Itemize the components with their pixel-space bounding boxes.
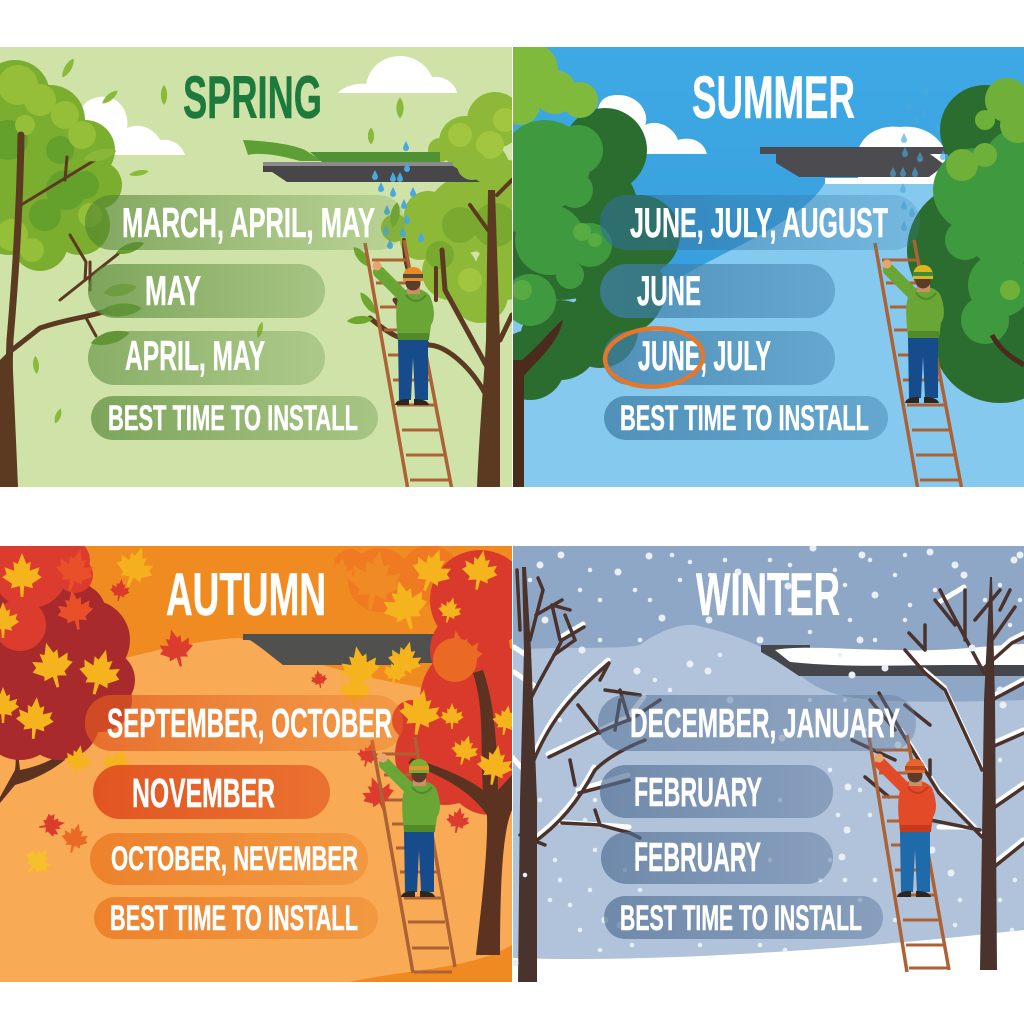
autumn ladder	[372, 737, 455, 973]
panel: spring	[0, 47, 555, 490]
winter gutter	[761, 644, 1024, 676]
winter worker	[874, 754, 936, 897]
summer pill: peak	[600, 264, 835, 318]
winter pill: february	[601, 832, 833, 884]
winter title: WINTER	[696, 561, 840, 628]
winter pill: best time: BEST TIME TO INSTALL	[620, 899, 862, 938]
summer highlight ring	[604, 326, 704, 389]
summer sky	[513, 47, 1024, 286]
spring pill: peak	[88, 264, 325, 318]
autumn pill: peak: NOVEMBER	[132, 770, 275, 816]
summer light hill	[513, 183, 1024, 487]
spring worker	[372, 262, 434, 405]
winter sky	[513, 546, 1024, 982]
panel: winter	[512, 546, 1024, 982]
winter pill: february: FEBRUARY	[634, 834, 761, 880]
winter ladder	[869, 735, 949, 972]
panel: summer	[480, 42, 1024, 490]
spring pill: months: MARCH, APRIL, MAY	[122, 199, 375, 246]
summer pill: best time: BEST TIME TO INSTALL	[620, 399, 869, 438]
spring pill: april may	[88, 331, 325, 385]
autumn falling leaves	[18, 625, 329, 881]
winter snowflakes	[515, 548, 1020, 963]
autumn pill: october november	[90, 833, 368, 885]
autumn left tree	[0, 532, 160, 803]
summer clouds	[590, 95, 945, 184]
autumn pill: best time: BEST TIME TO INSTALL	[110, 899, 358, 938]
autumn background	[0, 546, 512, 688]
spring clouds	[72, 56, 457, 155]
winter pill: best time	[604, 896, 883, 939]
summer water drops	[890, 104, 946, 231]
autumn gutter	[243, 634, 450, 665]
summer left tree	[513, 47, 680, 487]
winter snow ground	[513, 930, 1024, 982]
spring water drops	[372, 141, 424, 249]
summer pill: best time	[604, 396, 888, 440]
summer pill: peak: JUNE	[637, 267, 701, 314]
spring pill: peak: MAY	[145, 267, 201, 314]
winter pill: months	[598, 695, 916, 751]
autumn hill	[0, 638, 512, 982]
autumn pill: months: SEPTEMBER, OCTOBER	[107, 700, 392, 746]
winter pill: peak	[600, 765, 833, 818]
autumn worker	[378, 754, 440, 897]
summer pill: months	[600, 195, 920, 250]
autumn pill: october november: OCTOBER, NEVEMBER	[111, 840, 358, 878]
autumn pill: months	[85, 695, 403, 751]
summer pill: june july: JUNE, JULY	[638, 332, 771, 379]
autumn title: AUTUMN	[166, 561, 326, 628]
summer pill: june july	[603, 331, 835, 385]
autumn pill: peak	[93, 765, 330, 819]
spring right tree	[347, 92, 512, 487]
winter pill: peak: FEBRUARY	[634, 769, 762, 815]
autumn pill: best time	[94, 897, 378, 939]
autumn right tree	[334, 546, 512, 955]
spring pill: best time: BEST TIME TO INSTALL	[108, 399, 358, 438]
spring gutter	[243, 140, 487, 182]
spring ladder	[365, 240, 452, 490]
winter hill	[513, 625, 1024, 982]
panel: autumn	[0, 532, 540, 982]
winter left tree	[512, 567, 660, 982]
spring background	[0, 47, 512, 487]
summer title: SUMMER	[692, 64, 855, 131]
summer right tree	[907, 78, 1024, 403]
spring pill: april may: APRIL, MAY	[125, 332, 265, 379]
summer ladder	[875, 240, 962, 490]
spring title: SPRING	[183, 64, 322, 131]
autumn ground	[350, 945, 512, 982]
summer gutter	[760, 147, 965, 177]
spring pill: best time	[91, 396, 378, 440]
spring pill: months	[85, 195, 405, 250]
summer worker	[882, 260, 944, 403]
spring left tree	[0, 60, 146, 490]
winter right tree	[852, 577, 1024, 970]
spring falling leaves	[32, 57, 404, 424]
